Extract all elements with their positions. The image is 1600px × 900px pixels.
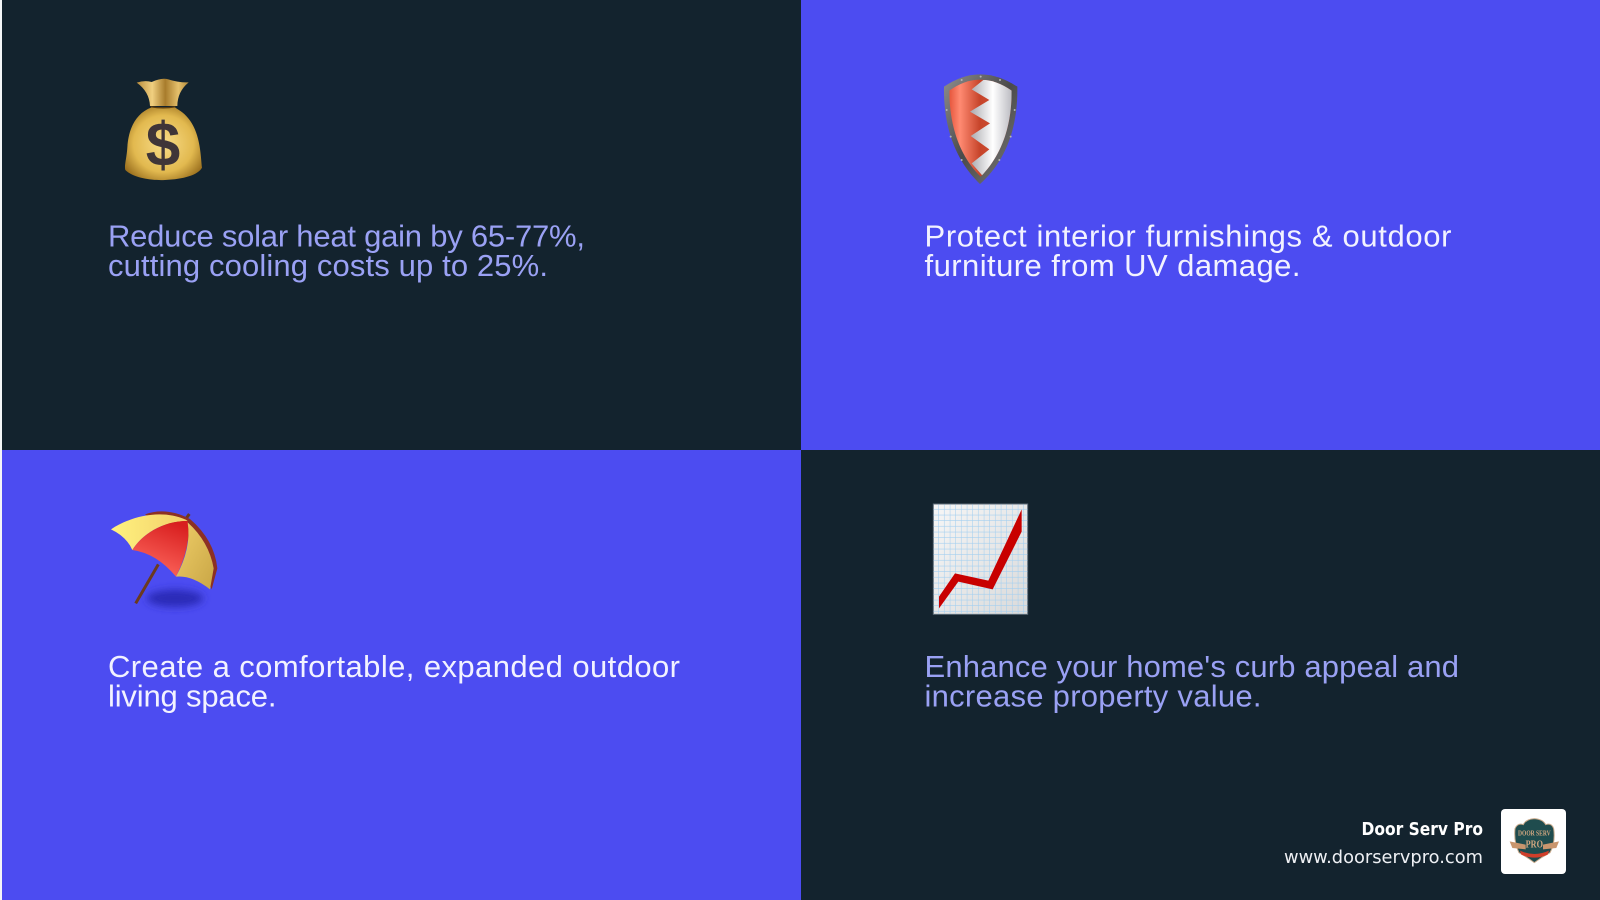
icon: shield [944,73,1017,184]
text: outdoor living benefit: Create a comfortable, expanded outdoor [108,649,680,684]
brand footer [1284,809,1566,874]
text: property value benefit: increase property value. [924,678,1262,714]
icon: money bag: $ [146,111,180,180]
text: outdoor living benefit: living space. [108,678,276,714]
text: solar heat benefit: cutting cooling costs up to 25%. [108,248,548,283]
panel: solar heat savings [2,0,801,450]
icon: beach umbrella [111,511,217,607]
text: solar heat benefit: Reduce solar heat gain by 65-77%, [108,218,585,254]
logo card [1501,809,1566,874]
website: www.doorservpro.com [1284,847,1483,868]
logo card: DOOR SERV [1518,828,1551,837]
text: UV benefit: Protect interior furnishings & outdoor [924,218,1452,254]
panel: property value [801,450,1600,900]
icon: money bag [125,79,202,180]
brand name: Door Serv Pro [1362,819,1483,840]
text: UV benefit: furniture from UV damage. [924,248,1300,283]
logo card: PRO [1526,839,1543,850]
panel: outdoor living [2,450,801,900]
panel: UV protection [801,0,1600,450]
icon: rising chart [933,504,1028,614]
text: property value benefit: Enhance your home's curb appeal and [924,649,1459,684]
